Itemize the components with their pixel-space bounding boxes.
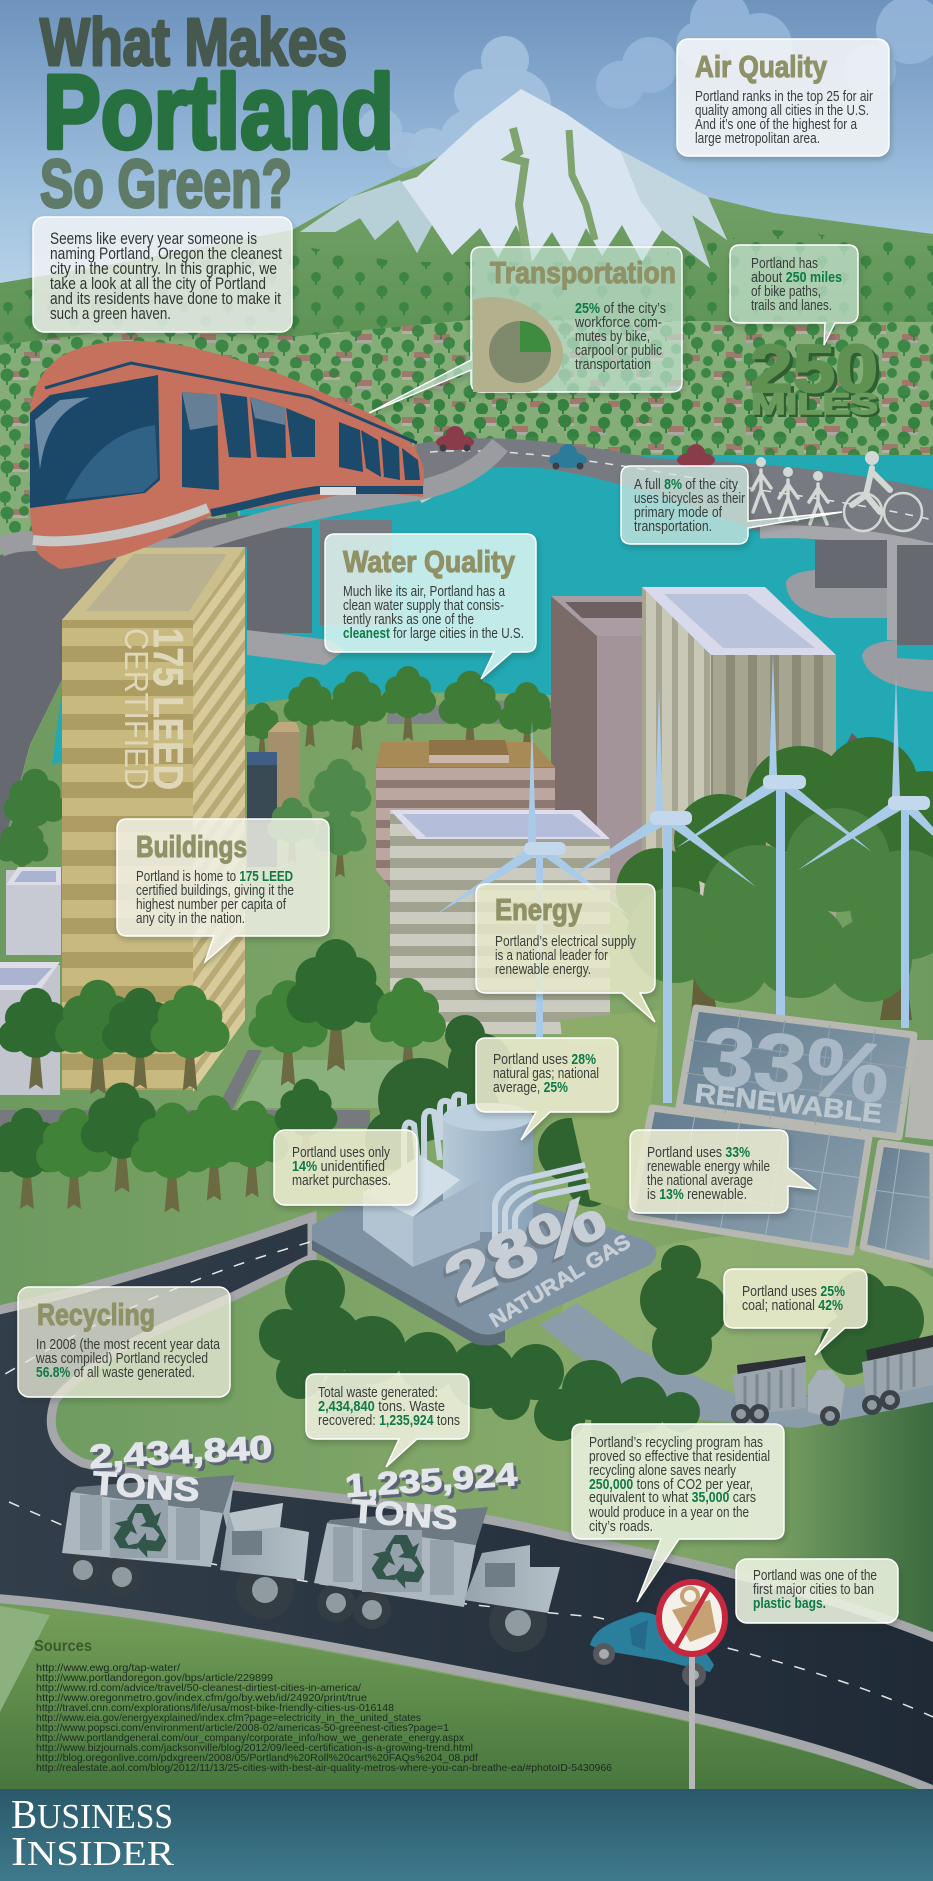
panel: buildings: Portland is home to 175 LEED: [136, 868, 293, 885]
panel: air quality: large metropolitan area.: [695, 130, 820, 147]
panel: intro: naming Portland, Oregon the cleanest: [50, 245, 282, 263]
panel: intro: [33, 217, 292, 332]
mountain and hills: [0, 120, 933, 345]
tree row by tower: [0, 939, 446, 1094]
callout: bicycle share: [621, 466, 842, 544]
callout: market purchases: market purchases.: [292, 1172, 391, 1189]
panel: intro: city in the country. In this graphic, we: [50, 260, 277, 278]
panel: buildings: certified buildings, giving it the: [136, 882, 294, 899]
coal truck one: [731, 1356, 845, 1426]
heading: energy: Energy: [495, 892, 583, 927]
lower tree row: [0, 1079, 337, 1212]
callout: recycling program: would produce in a year on the: [588, 1504, 749, 1521]
elevated track: [0, 445, 500, 665]
bridge piers right: [786, 540, 933, 692]
mid trees: [267, 759, 371, 877]
light lawn: [236, 1060, 405, 1108]
icon: recycling: [108, 1504, 171, 1562]
plant text: natural gas: NATURAL GAS: [486, 1230, 635, 1332]
callout: total waste: [306, 1374, 469, 1467]
panel: intro: and its residents have done to make it: [50, 290, 281, 308]
panel: transportation: workforce com-: [574, 314, 662, 331]
lawn light wedge: [0, 1606, 50, 1712]
callout: renewable: renewable energy while: [647, 1158, 770, 1175]
footer band: [0, 1789, 933, 1881]
sources list: http://www.popsci.com/environment/article/2008-02/americas-50-greenest-cities?page=1: [36, 1722, 449, 1734]
heading: buildings: Buildings: [136, 829, 247, 864]
lawn highlight upper: [560, 1010, 660, 1215]
forest behind turbines: [616, 737, 933, 1030]
panel: air quality: quality among all cities in the U.S.: [695, 102, 869, 119]
bike road and bridge: [417, 438, 933, 550]
truck text: 2,434,840: 2,434,840: [88, 1428, 273, 1475]
tower text: 175 LEED: 175 LEED: [145, 628, 192, 790]
recycling truck one: [62, 1475, 309, 1619]
callout: natural gas: natural gas; national: [493, 1065, 599, 1082]
sources list: http://www.oregonmetro.gov/index.cfm/go/by.web/id/24920/print/true: [36, 1692, 367, 1704]
panel: recycling: [18, 1287, 230, 1397]
coal truck two: [862, 1335, 933, 1415]
sources list: [34, 1638, 612, 1774]
callout: recycling program: city’s roads.: [589, 1518, 653, 1535]
sources list: http://www.bizjournals.com/jacksonville/blog/2012/09/leed-certification-is-a-growing-trend.html: [36, 1742, 473, 1754]
callout: 250 miles: trails and lanes.: [751, 297, 832, 314]
callout: market purchases: Portland uses only: [292, 1144, 390, 1161]
heading: water quality: Water Quality: [343, 544, 516, 579]
panel: energy: renewable energy.: [495, 961, 591, 978]
callout: renewable: [630, 1130, 815, 1213]
river: [240, 455, 933, 805]
panel: transportation: mutes by bike,: [575, 328, 650, 345]
callout: renewable: the national average: [647, 1172, 753, 1189]
clouds: [358, 0, 933, 172]
panel: recycling: In 2008 (the most recent year data: [36, 1336, 221, 1353]
plant text: 28%: 28%: [433, 1179, 616, 1316]
panel: water quality: [325, 534, 536, 679]
panel: air quality: [677, 39, 889, 156]
tower text: certified: CERTIFIED: [118, 628, 155, 790]
monorail train: [30, 341, 424, 569]
panel: air quality: Portland ranks in the top 25 for air: [695, 88, 873, 105]
recycling truck two: [314, 1507, 560, 1652]
city neighbourhood: [0, 320, 933, 565]
250 miles big label: MILES: [751, 388, 878, 421]
title line: So Green?: So Green?: [40, 146, 292, 222]
panel: transportation: transportation: [575, 356, 651, 373]
title: [40, 5, 394, 222]
panel: water quality: clean water supply that consis-: [343, 597, 504, 614]
blue car: [590, 1612, 714, 1687]
brown building: [376, 740, 555, 900]
icon: recycling: [366, 1535, 429, 1593]
panel: transportation: [369, 247, 682, 413]
panel: transportation: carpool or public: [575, 342, 662, 359]
tan LEED tower: [62, 547, 245, 1092]
plant text: 28% shadow: 28%: [431, 1183, 614, 1320]
250 miles big label: 250: [753, 334, 881, 410]
pie chart: 25 percent: [473, 297, 563, 392]
sources list: http://www.portlandgeneral.com/our_company/corporate_info/how_we_generate_energy.aspx: [36, 1732, 465, 1744]
logo: Business Insider: [11, 1791, 175, 1874]
callout: recycling program: recycling alone saves nearly: [589, 1462, 736, 1479]
logo: Business Insider: BUSINESS: [11, 1791, 173, 1837]
panel: buildings: [117, 819, 329, 962]
title line: What Makes: What Makes: [40, 5, 347, 80]
panel: buildings: highest number per capita of: [136, 896, 287, 913]
sources list: http://www.eia.gov/energyexplained/index.cfm?page=electricity_in_the_united_states: [36, 1712, 421, 1724]
road dark tree belt: [259, 1260, 700, 1449]
striped white building: [390, 810, 610, 1040]
panel: transportation: 25% of the city’s: [575, 300, 666, 317]
callout: total waste: Total waste generated:: [318, 1384, 438, 1401]
callout: plastic bags: Portland was one of the: [753, 1567, 877, 1584]
callout: natural gas: Portland uses 28%: [493, 1051, 596, 1068]
callout: plastic bags: first major cities to ban: [753, 1581, 874, 1598]
panel: recycling: was compiled) Portland recycled: [35, 1350, 208, 1367]
lawn below road: [0, 1606, 933, 1800]
trees by coal trucks: [640, 1245, 927, 1382]
callout: coal: Portland uses 25%: [742, 1283, 845, 1300]
pale tall building: [642, 587, 836, 920]
truck text: tons two: TONS: [351, 1492, 459, 1536]
callout: plastic bags: plastic bags.: [753, 1595, 826, 1612]
callout: bicycle share: A full 8% of the city: [634, 476, 738, 493]
panel: energy: is a national leader for: [495, 947, 608, 964]
callout: natural gas: [476, 1038, 618, 1140]
heading: air quality: Air Quality: [695, 49, 828, 84]
panel: water quality: cleanest for large cities in the U.S.: [343, 625, 524, 642]
snowy peak: [300, 89, 727, 268]
panel: energy: [476, 884, 655, 1022]
callout: 250 miles: [730, 245, 858, 345]
sources list: http://realestate.aol.com/blog/2012/11/13/25-cities-with-best-air-quality-metros-where-you-can-breathe-ea/#photoID-5430966: [36, 1762, 612, 1774]
truck text: tons one: TONS: [92, 1464, 201, 1508]
callout: bicycle share: primary mode of: [634, 504, 723, 521]
truck text: 1,235,924 shadow: 1,235,924: [347, 1459, 521, 1507]
sky background: [0, 0, 933, 340]
gas plant: [312, 1095, 656, 1346]
sources list: http://www.ewg.org/tap-water/: [36, 1662, 180, 1674]
panel: recycling: 56.8% of all waste generated.: [36, 1364, 195, 1381]
title line: Portland: Portland: [43, 54, 394, 171]
sources list: http://www.portlandoregon.gov/bps/article/229899: [36, 1672, 273, 1684]
250 miles big label: MILES: [753, 390, 880, 423]
truck text: 2,434,840 shadow: 2,434,840: [91, 1431, 276, 1478]
callout: natural gas: average, 25%: [493, 1079, 568, 1096]
callout: recycling program: Portland’s recycling program has: [589, 1434, 763, 1451]
icon: pedestrians and cyclist: [752, 451, 922, 531]
callout: 250 miles: Portland has: [751, 255, 818, 272]
green land: [0, 680, 933, 1800]
panel: intro: Seems like every year someone is: [50, 230, 257, 248]
callout: recycling program: equivalent to what 35,000 cars: [589, 1489, 756, 1506]
callout: coal: [724, 1269, 867, 1355]
panel text: 33%: 33%: [698, 1010, 894, 1120]
right edge lawn shading: [770, 1395, 933, 1645]
left road: [0, 515, 250, 860]
lower curving road: [0, 1217, 933, 1795]
small buildings behind: [247, 722, 300, 867]
sources heading: Sources: [34, 1638, 92, 1655]
sign: no plastic bags: [659, 1582, 725, 1789]
callout: bicycle share: transportation.: [634, 518, 712, 535]
callout: plastic bags: [736, 1559, 898, 1623]
small pale buildings left: [0, 867, 61, 1095]
sources list: http://travel.cnn.com/explorations/life/usa/most-bike-friendly-cities-us-016148: [36, 1702, 394, 1714]
250 miles big label: 250: [750, 331, 878, 407]
panel: water quality: tently ranks as one of the: [343, 611, 474, 628]
sources list: http://blog.oregonlive.com/pdxgreen/2008/05/Portland%20Roll%20cart%20FAQs%204_08.pdf: [36, 1752, 478, 1764]
peak behind forest: [838, 733, 880, 760]
heading: transportation: Transportation: [490, 255, 676, 290]
gas plant access road: [540, 1303, 933, 1428]
teal sliver: [52, 690, 62, 765]
trees along river: [242, 666, 555, 757]
panel text: renewable: RENEWABLE: [693, 1078, 884, 1129]
callout: total waste: 2,434,840 tons. Waste: [318, 1398, 445, 1415]
panel: intro: take a look at all the city of Portland: [50, 275, 266, 293]
grey street behind river trees: [387, 700, 551, 724]
panel: air quality: And it’s one of the highest for a: [695, 116, 858, 133]
heading: recycling: Recycling: [37, 1297, 155, 1332]
panel: energy: Portland’s electrical supply: [495, 933, 636, 950]
callout: recycling program: [572, 1424, 784, 1602]
callout: 250 miles: about 250 miles: [751, 269, 842, 286]
panel: intro: such a green haven.: [50, 305, 171, 323]
callout: market purchases: 14% unidentified: [292, 1158, 385, 1175]
callout: renewable: is 13% renewable.: [647, 1186, 747, 1203]
callout: coal: coal; national 42%: [742, 1297, 843, 1314]
cross street: [0, 1050, 370, 1128]
callout: market purchases: [274, 1130, 417, 1205]
mauve building: [551, 596, 642, 900]
panel: water quality: Much like its air, Portland has a: [343, 583, 506, 600]
callout: 250 miles: of bike paths,: [751, 283, 821, 300]
callout: recycling program: 250,000 tons of CO2 per year,: [589, 1476, 753, 1493]
turbine towers and blades: [435, 653, 933, 1103]
panel: buildings: any city in the nation.: [136, 910, 245, 927]
sources list: http://www.rd.com/advice/travel/50-cleanest-dirtiest-cities-in-america/: [36, 1682, 361, 1694]
callout: recycling program: proved so effective that residential: [589, 1448, 770, 1465]
left trees: [0, 769, 66, 887]
logo: Business Insider: INSIDER: [11, 1828, 175, 1874]
hillside trees: [0, 230, 933, 352]
lawn highlight: [560, 1235, 933, 1405]
callout: bicycle share: uses bicycles as their: [634, 490, 745, 507]
small cars on road: [436, 426, 715, 470]
callout: renewable: Portland uses 33%: [647, 1144, 750, 1161]
dark trees around plant: [365, 1015, 612, 1207]
truck text: 1,235,924: 1,235,924: [344, 1456, 518, 1504]
callout: total waste: recovered: 1,235,924 tons: [318, 1412, 460, 1429]
solar panels: [631, 1008, 933, 1265]
